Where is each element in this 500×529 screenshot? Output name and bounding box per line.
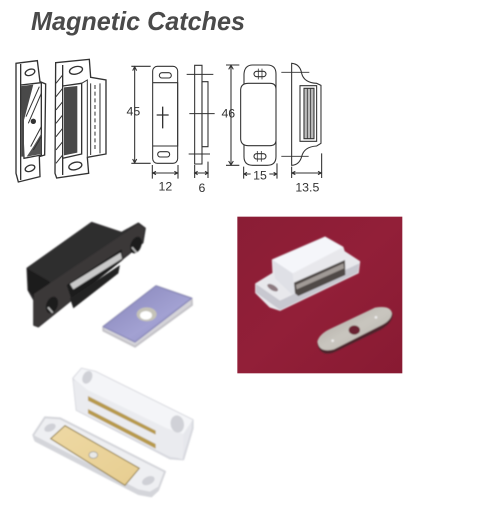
dimension: front view 45 by 12: 12	[158, 180, 172, 194]
steel strike plate	[317, 307, 393, 354]
red background	[237, 217, 402, 373]
white catch body with brass magnets	[73, 369, 193, 459]
white plate with brass strike	[33, 417, 165, 497]
dimension: back view 46 by 15: 46	[221, 107, 235, 121]
black catch body	[27, 223, 145, 327]
dimension: back view 46 by 15	[221, 65, 277, 182]
dimension: profile view 13.5: 13.5	[295, 181, 319, 195]
sketch: catch body perspective	[55, 59, 106, 178]
white catch body	[256, 237, 359, 310]
photo: white catch with brass plates	[33, 369, 193, 497]
dimension: front view 45 by 12: 45	[126, 104, 140, 118]
title: Magnetic Catches	[31, 6, 245, 36]
dimension: side view 6: 6	[199, 181, 206, 195]
sketch: catch plate perspective	[16, 61, 46, 182]
dimension: back view 46 by 15: 15	[253, 168, 267, 182]
purple strike plate	[103, 286, 192, 347]
dimension: side view 6	[187, 65, 215, 195]
photo: white catch on red background	[237, 217, 402, 373]
dimension: front view 45 by 12	[126, 66, 178, 194]
photo: black magnetic catch with purple plate	[27, 223, 192, 347]
dimension: profile view 13.5	[281, 63, 322, 195]
